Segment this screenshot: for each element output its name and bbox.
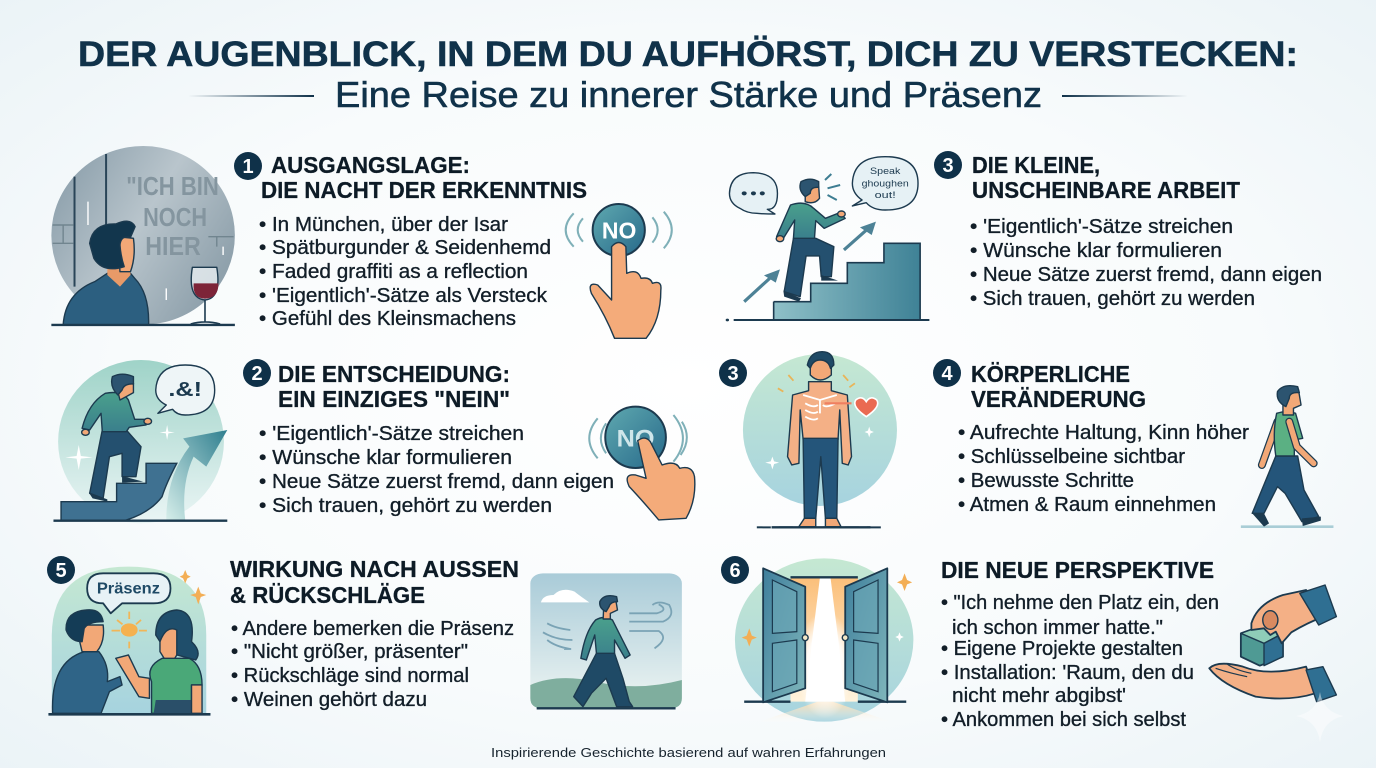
number badge 6: 6: [729, 560, 741, 582]
heading: AUSGANGSLAGE:: [271, 152, 470, 178]
bullet list: • Rückschläge sind normal: [231, 664, 469, 687]
illustration: man climbing stairs with speech bubbles: [726, 157, 929, 321]
subtitle line 2: Eine Reise zu innerer Stärke und Präsenz: [335, 74, 1042, 115]
icon: NO button with pointing hand: NO: [617, 425, 655, 452]
bullet list: • Installation: 'Raum, den du: [941, 661, 1194, 684]
bullet list: • Bewusste Schritte: [958, 469, 1134, 492]
bullet list: • Faded graffiti as a reflection: [259, 260, 528, 283]
bullet list: [970, 215, 1322, 310]
icon: walking man in wind card: [530, 573, 682, 708]
bullet list: • Neue Sätze zuerst fremd, dann eigen: [259, 470, 614, 493]
icon: hands passing a cube: [1209, 585, 1336, 702]
bullet list: [958, 421, 1249, 516]
panel 5: Wirkung nach außen: [47, 556, 682, 714]
panel 2: Die kleine, unscheinbare Arbeit: [726, 151, 1322, 321]
bullet list: • Atmen & Raum einnehmen: [958, 493, 1216, 516]
illustration: man before graffiti wall: [51, 146, 235, 325]
bullet list: [231, 617, 514, 711]
number badge 3 (illustration): [719, 359, 747, 387]
panel 4: Körperliche Veränderung: [719, 352, 1333, 527]
number badge 5: 5: [55, 560, 67, 582]
bullet list: • Neue Sätze zuerst fremd, dann eigen: [970, 263, 1322, 286]
number badge 4: 4: [941, 363, 953, 385]
bullet list: • Spätburgunder & Seidenhemd: [259, 236, 551, 259]
title: [78, 35, 1298, 115]
bullet list: [259, 213, 551, 330]
number badge 5: [47, 556, 75, 584]
illustration: man on steps with rising arrow: [53, 360, 227, 523]
icon: NO button with pointing hand: [566, 204, 672, 338]
number badge 2: 2: [251, 363, 263, 385]
bullet list: • Sich trauen, gehört zu werden: [970, 287, 1255, 310]
bullet list: • 'Eigentlich'-Sätze als Versteck: [259, 284, 548, 307]
bullet list: • Ankommen bei sich selbst: [941, 708, 1186, 731]
bullet list: [941, 591, 1219, 731]
heading: KÖRPERLICHE: [971, 361, 1130, 387]
illustration: man before graffiti wall: "ICH BIN: [126, 172, 219, 201]
bullet list: • Eigene Projekte gestalten: [941, 637, 1183, 660]
bullet list: nicht mehr abgibst': [952, 684, 1126, 707]
heading: [972, 152, 1240, 203]
bullet list: • Gefühl des Kleinsmachens: [259, 307, 516, 330]
heading: [230, 556, 519, 608]
panel 1: Ausgangslage: [51, 146, 672, 338]
bullet list: • Andere bemerken die Präsenz: [231, 617, 514, 640]
heading: DIE NACHT DER ERKENNTNIS: [261, 177, 587, 203]
heading: EIN EINZIGES "NEIN": [278, 386, 510, 412]
bullet list: • Wünsche klar formulieren: [970, 239, 1222, 262]
icon: NO button with pointing hand: NO: [602, 219, 636, 244]
heading: WIRKUNG NACH AUSSEN: [230, 556, 519, 582]
heading: UNSCHEINBARE ARBEIT: [972, 177, 1240, 203]
number badge 3: [934, 151, 962, 179]
heading: DIE ENTSCHEIDUNG:: [278, 361, 510, 387]
illustration: man on steps with rising arrow: .&!: [168, 378, 202, 400]
illustration: man before graffiti wall: NOCH: [143, 203, 207, 232]
bullet list: • Aufrechte Haltung, Kinn höher: [958, 421, 1249, 444]
number badge 3: 3: [942, 155, 954, 177]
bullet list: • Wünsche klar formulieren: [259, 446, 512, 469]
number badge 1: 1: [242, 156, 254, 178]
number badge 1: [234, 152, 262, 180]
panel 3: Die Entscheidung: [53, 359, 695, 523]
number badge 2: [243, 359, 271, 387]
heading: VERÄNDERUNG: [971, 386, 1146, 412]
illustration: man before graffiti wall: HIER: [145, 232, 201, 261]
bullet list: • Schlüsselbeine sichtbar: [958, 445, 1185, 468]
bullet list: [259, 422, 614, 517]
heading: DIE NEUE PERSPEKTIVE: [941, 557, 1214, 583]
heading: DIE KLEINE,: [972, 152, 1100, 178]
heading: [971, 361, 1146, 412]
bullet list: • In München, über der Isar: [259, 213, 508, 236]
illustration: man climbing stairs with speech bubbles: out!: [875, 191, 896, 201]
illustration: two people talking: Präsenz: [97, 579, 160, 597]
heading: [278, 361, 510, 412]
icon: faint sparkle watermark: [1296, 692, 1344, 742]
bullet list: • Weinen gehört dazu: [231, 688, 427, 711]
bullet list: • "Nicht größer, präsenter": [231, 640, 468, 663]
illustration: upright body with heart: [743, 352, 897, 527]
bullet list: ich schon immer hatte.": [952, 616, 1163, 639]
heading: & RÜCKSCHLÄGE: [230, 582, 425, 608]
number badge 4: [933, 359, 961, 387]
panel 6: Die neue Perspektive: [721, 556, 1344, 742]
illustration: open door with light: [735, 558, 913, 723]
bullet list: • 'Eigentlich'-Sätze streichen: [970, 215, 1233, 238]
icon: NO button with pointing hand: [589, 407, 695, 520]
illustration: man climbing stairs with speech bubbles: ghoughen: [862, 180, 909, 189]
footer note: Inspirierende Geschichte basierend auf wahren Erfahrungen: [491, 745, 886, 760]
illustration: two people talking: [48, 567, 210, 714]
number badge 3 (illustration): 3: [727, 363, 739, 385]
heading: [261, 152, 587, 203]
title line 1: DER AUGENBLICK, IN DEM DU AUFHÖRST, DICH ZU VERSTECKEN:: [78, 35, 1298, 74]
illustration: man climbing stairs with speech bubbles: Speak: [870, 167, 901, 177]
icon: walking man: [1241, 386, 1333, 527]
bullet list: • "Ich nehme den Platz ein, den: [941, 591, 1219, 614]
number badge 6: [721, 556, 749, 584]
bullet list: • Sich trauen, gehört zu werden: [259, 494, 552, 517]
bullet list: • 'Eigentlich'-Sätze streichen: [259, 422, 524, 445]
